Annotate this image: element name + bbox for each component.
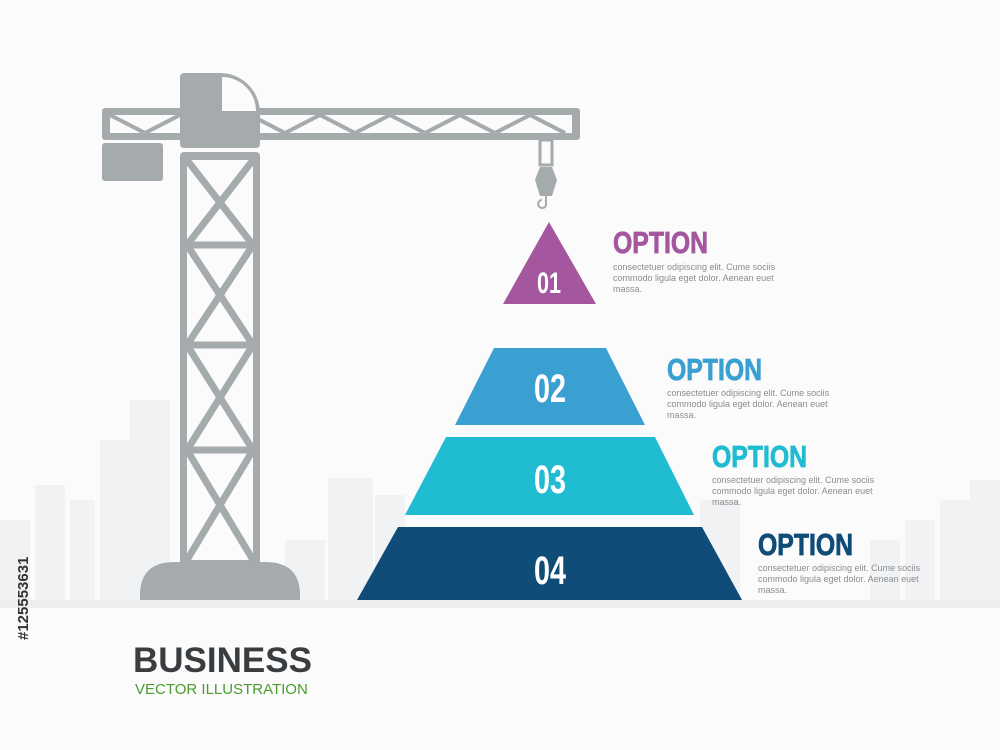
counterweight [102,143,163,181]
option 04: consectetuer odipiscing elit. Cume sociis [758,563,921,573]
tower [180,152,260,567]
pyramid [357,222,742,600]
level 02 [455,348,645,425]
option 02 [667,352,830,420]
option 04 [758,527,921,595]
option 01: commodo ligula eget dolor. Aenean euet [613,273,774,283]
option 03: consectetuer odipiscing elit. Cume sociis [712,475,875,485]
level 04 [357,527,742,600]
business title [133,641,312,698]
option 02: commodo ligula eget dolor. Aenean euet [667,399,828,409]
option texts [613,225,921,595]
crane [102,73,580,600]
level 01: 01 [537,265,561,300]
ground [0,600,1000,608]
level 01 [503,222,596,304]
option 01: consectetuer odipiscing elit. Cume sociis [613,262,776,272]
level 03: 03 [534,457,566,502]
boom [102,108,580,140]
option 04: massa. [758,585,787,595]
level 03 [405,437,694,515]
option 02: OPTION [667,352,762,387]
option 01: massa. [613,284,642,294]
option 02: massa. [667,410,696,420]
option 03: massa. [712,497,741,507]
skyline background [0,400,1000,602]
option 01: OPTION [613,225,708,260]
option 04: OPTION [758,527,853,562]
hook [535,140,557,208]
business title: BUSINESS [133,641,312,680]
option 01 [613,225,776,294]
cab [180,73,260,148]
option 03: OPTION [712,439,807,474]
level 04: 04 [534,548,567,593]
option 03 [712,439,875,507]
option 03: commodo ligula eget dolor. Aenean euet [712,486,873,496]
option 02: consectetuer odipiscing elit. Cume sociis [667,388,830,398]
base [140,562,300,600]
business title: VECTOR ILLUSTRATION [135,681,308,698]
level 02: 02 [534,366,566,411]
option 04: commodo ligula eget dolor. Aenean euet [758,574,919,584]
stock id: #125553631 [15,557,32,640]
